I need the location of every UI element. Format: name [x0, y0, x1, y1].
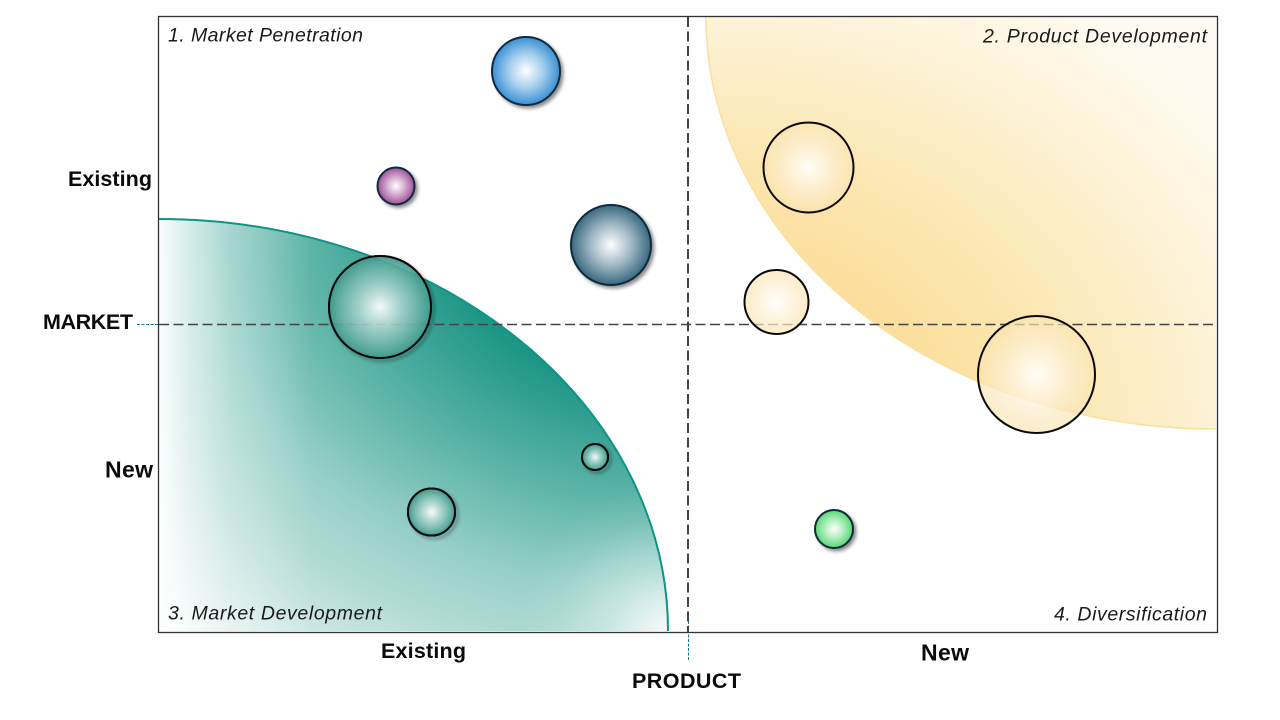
plot frame — [158, 16, 1218, 632]
axis tick: market — [137, 324, 160, 326]
y axis label existing: Existing — [68, 167, 152, 191]
bubble: green — [815, 510, 853, 548]
y axis title: MARKET — [43, 310, 133, 334]
bubble: slate — [571, 205, 651, 285]
x axis label existing: Existing — [381, 639, 466, 663]
quadrant label 3: 3. Market Development — [168, 602, 384, 624]
yellow quadrant shape: product development — [706, 17, 1216, 429]
x axis title: PRODUCT — [632, 669, 741, 693]
x axis label new: New — [921, 640, 969, 666]
bubble: yellow large — [978, 316, 1095, 433]
bubble: medium teal — [408, 488, 455, 536]
quadrant label 1: 1. Market Penetration — [168, 24, 363, 46]
bubble: yellow top — [764, 122, 854, 212]
bubble: blue — [492, 37, 560, 105]
bubble: large teal — [329, 256, 431, 358]
horizontal dashed divider — [159, 324, 1217, 326]
quadrant label 4: 4. Diversification — [1054, 604, 1207, 626]
bubble: small teal — [582, 444, 608, 470]
vertical dashed divider — [687, 17, 689, 632]
quadrant label 2: 2. Product Development — [982, 26, 1209, 48]
y axis label new: New — [105, 456, 153, 482]
teal quadrant shape: market development — [159, 219, 668, 631]
bubble: purple — [378, 168, 414, 204]
bubble: yellow small — [744, 270, 808, 334]
axis tick: product — [688, 612, 690, 661]
